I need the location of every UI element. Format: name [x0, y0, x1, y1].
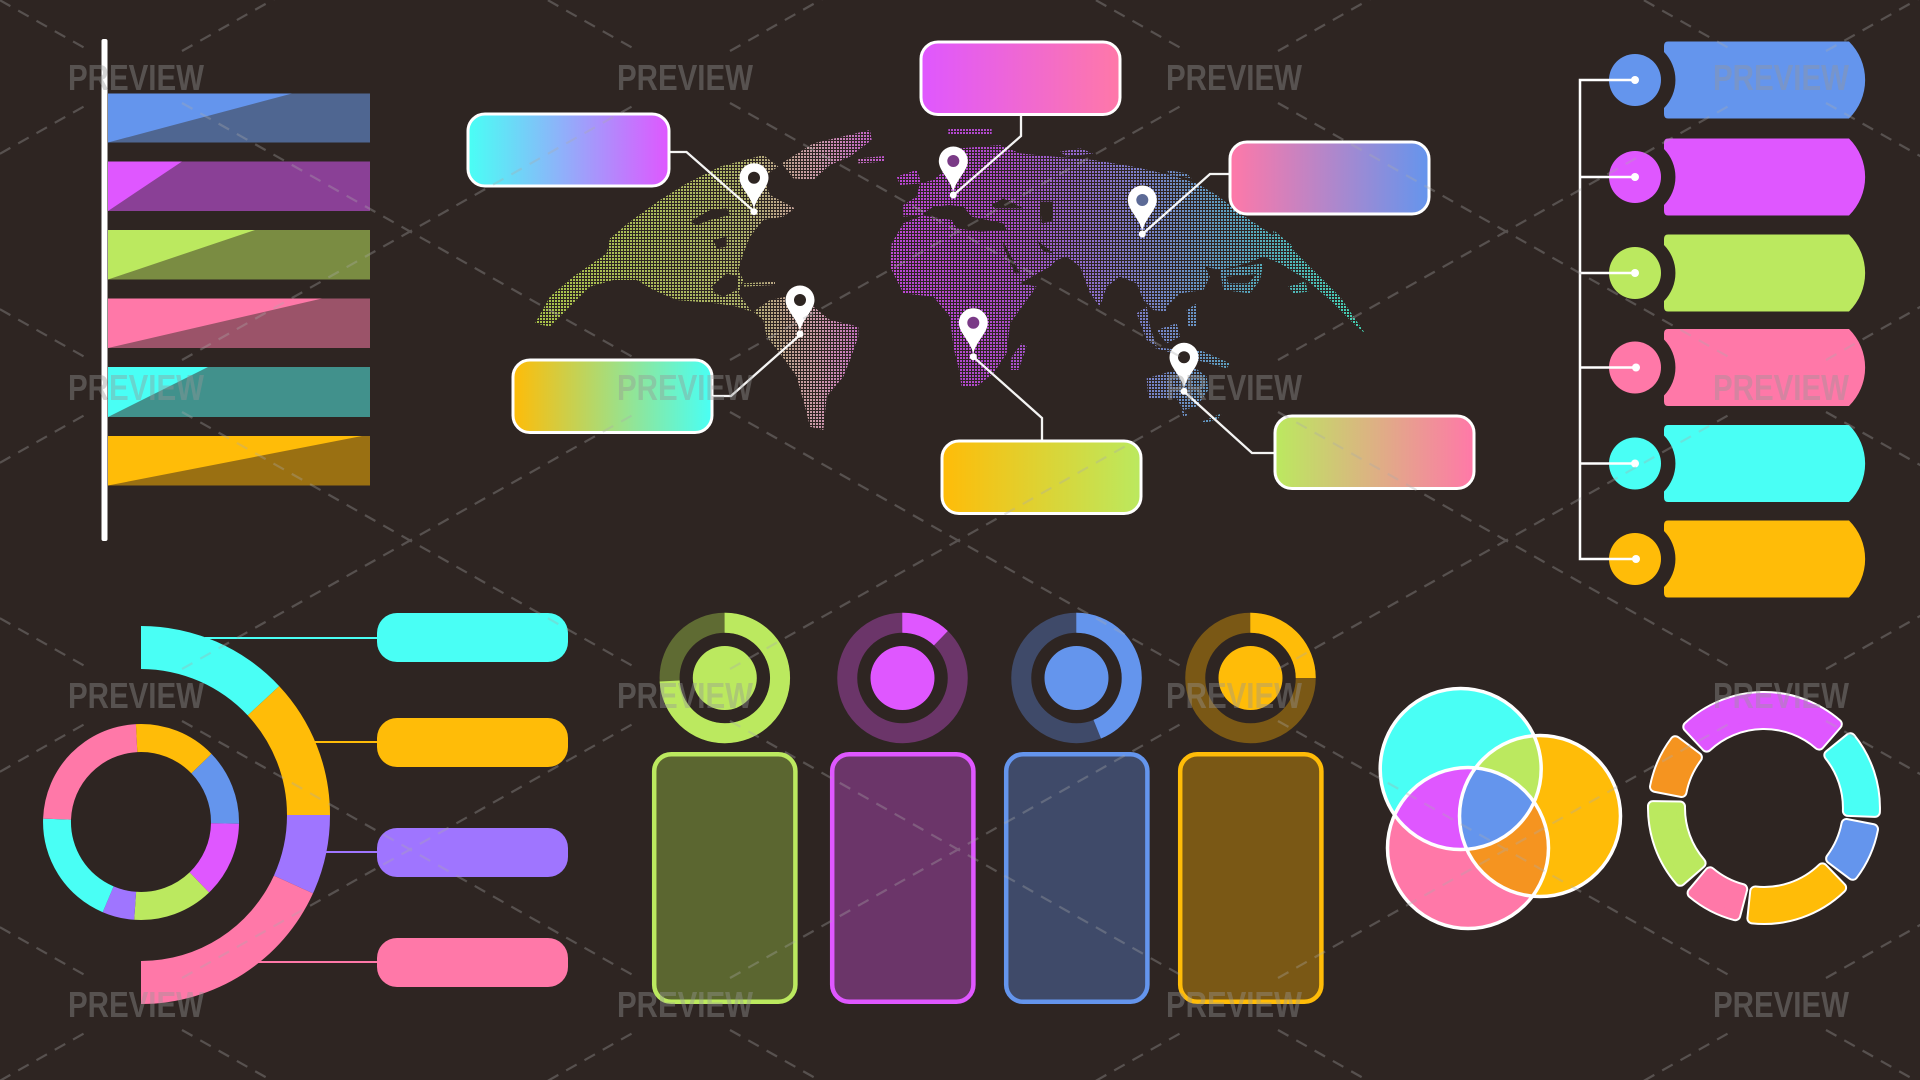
outer half ring — [141, 626, 330, 1004]
watermark text: PREVIEW — [617, 984, 753, 1025]
watermark text: PREVIEW — [1166, 367, 1302, 408]
watermark text: PREVIEW — [1713, 984, 1849, 1025]
icon: map pin North America — [740, 163, 768, 215]
watermark text: PREVIEW — [1166, 57, 1302, 98]
legend pill: cyan — [377, 613, 568, 662]
card 3: blue — [1006, 623, 1147, 1002]
card 1: lime — [654, 623, 795, 1002]
coloured segments — [1653, 697, 1875, 919]
callout box: amber to cyan — [513, 360, 712, 432]
panel: stacked triangle bars — [102, 39, 370, 541]
vertical axis — [102, 39, 108, 541]
watermark text: PREVIEW — [68, 57, 204, 98]
legend connector lines — [205, 638, 378, 962]
icon: map pin South America — [786, 286, 814, 338]
watermark text: PREVIEW — [1713, 675, 1849, 716]
watermark text: PREVIEW — [617, 367, 753, 408]
tab row 5: cyan — [1609, 425, 1865, 502]
watermark text: PREVIEW — [1713, 57, 1849, 98]
watermark text: PREVIEW — [617, 57, 753, 98]
tab row 1: blue — [1609, 42, 1865, 118]
tab row 4: pink — [1609, 329, 1865, 406]
legend pill: pink — [377, 938, 568, 987]
bar 1: blue — [108, 94, 370, 142]
watermark text: PREVIEW — [1713, 367, 1849, 408]
watermark text: PREVIEW — [68, 367, 204, 408]
panel: nested ring chart with legend pills — [43, 613, 568, 1004]
icon: map pin Asia — [1128, 186, 1157, 238]
bar 6: amber — [108, 436, 370, 486]
watermark text: PREVIEW — [617, 675, 753, 716]
panel: map callouts — [468, 42, 1474, 514]
icon: map pin Australia — [1170, 343, 1198, 395]
legend pill: purple — [377, 828, 568, 877]
inner donut ring — [43, 724, 239, 920]
bar 2: magenta — [108, 162, 370, 211]
tab row 6: amber — [1609, 520, 1865, 598]
icon: map pin Africa — [959, 308, 988, 360]
icon: map pin Europe — [939, 146, 968, 198]
bracket connector — [1580, 76, 1640, 563]
white segment outlines — [1653, 697, 1875, 919]
bar 4: pink — [108, 298, 370, 348]
callout connectors — [670, 115, 1274, 453]
callout box: amber to lime — [942, 441, 1141, 514]
callout box: pink to blue — [1230, 142, 1429, 214]
watermark text: PREVIEW — [1166, 984, 1302, 1025]
tab row 3: lime — [1609, 234, 1865, 312]
legend pill: amber — [377, 718, 568, 767]
card 4: amber — [1180, 623, 1321, 1002]
bar 3: lime — [108, 230, 370, 280]
venn diagram — [1380, 688, 1620, 928]
world map: dotted continents — [535, 129, 1364, 430]
callout box: lime to pink — [1275, 416, 1474, 488]
card 2: magenta — [832, 623, 973, 1002]
bar 5: cyan — [108, 367, 370, 417]
callout box: cyan to magenta — [468, 114, 669, 186]
watermark text: PREVIEW — [68, 675, 204, 716]
callout box: magenta to pink — [921, 42, 1120, 114]
segmented ring — [1653, 697, 1875, 919]
tab row 2: magenta — [1609, 138, 1865, 216]
panel: bracket list with tabs — [1580, 42, 1865, 598]
watermark text: PREVIEW — [68, 984, 204, 1025]
panel: progress cards — [654, 623, 1321, 1002]
watermark text: PREVIEW — [1166, 675, 1302, 716]
